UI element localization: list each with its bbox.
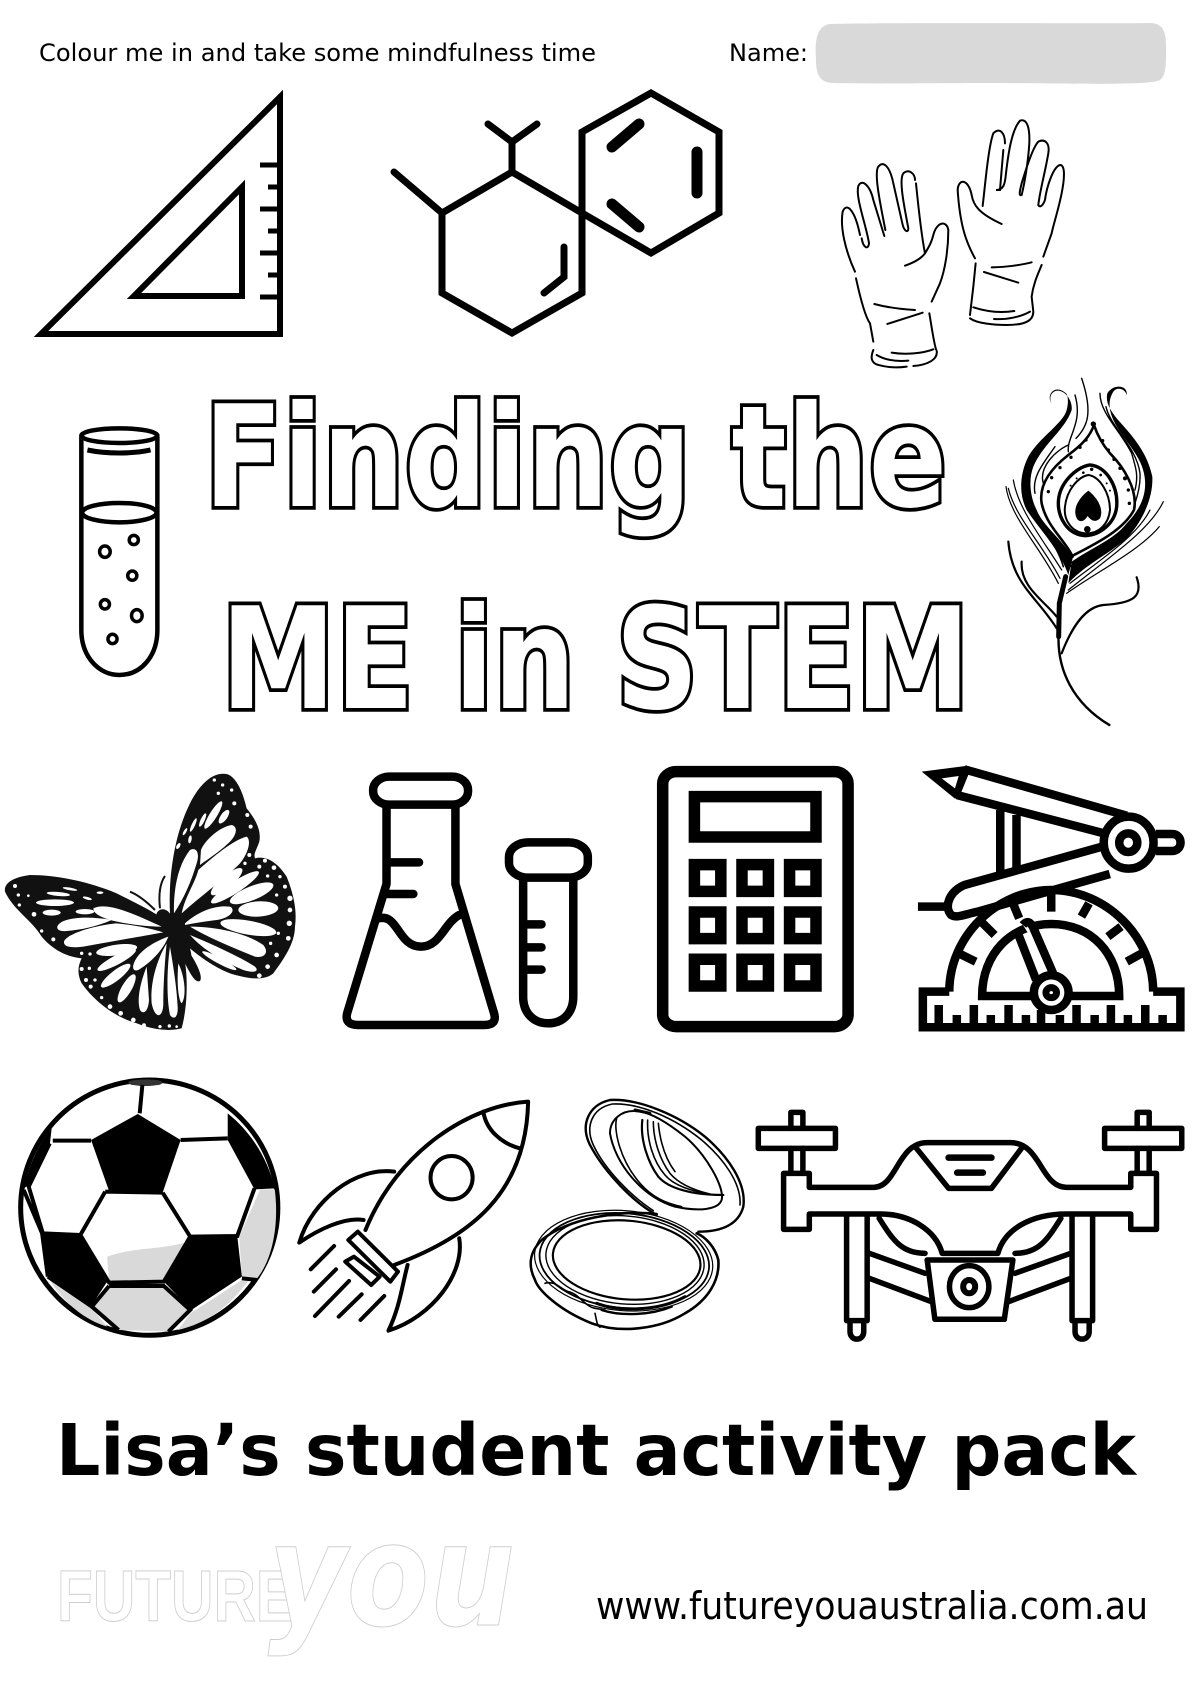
title: ME in STEM: ME in STEM [221,578,970,742]
logo: Future You: FUTURE [57,1557,295,1637]
logo: Future You: you [268,1492,515,1659]
icon: compass and protractor [918,766,1181,1027]
icon: butterfly [5,774,296,1030]
icon: rocket [299,1102,528,1331]
title: Finding the: Finding the [204,376,947,540]
icon: test tube with bubbles [81,428,157,675]
icon: gloves [842,120,1064,367]
icon: set square [41,97,280,334]
heading: student activity pack: Lisa’s student activity pack [56,1409,1138,1492]
icon: soccer ball [21,1079,278,1335]
icon: calculator [663,772,848,1027]
icon: conical flask [347,777,495,1025]
website url: www.futureyouaustralia.com.au [596,1584,1148,1628]
name input box [816,23,1166,84]
logo: Future You [57,1492,515,1659]
icon: test tube [509,842,588,1023]
icon: peacock feather [1006,378,1163,725]
name label: Name: [729,39,808,67]
instruction text: Colour me in and take some mindfulness time [39,39,596,67]
icon: chemical molecule [394,93,719,333]
icon: drone [758,1112,1182,1339]
icon: makeup compact [530,1100,744,1329]
